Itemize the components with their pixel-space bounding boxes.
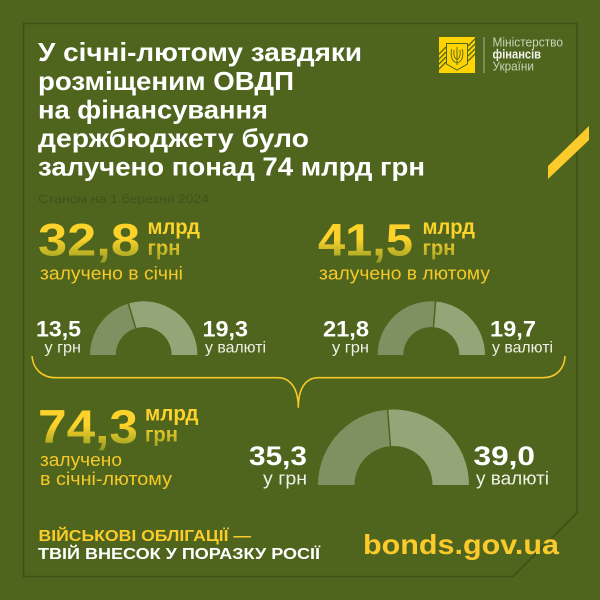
- February total: [318, 215, 475, 266]
- panel: February: [318, 215, 553, 356]
- February UAH value: у грн: [332, 340, 369, 356]
- slogan: ВІЙСЬКОВІ ОБЛІГАЦІЇ —: [38, 527, 252, 545]
- title: залучено понад 74 млрд грн: [38, 152, 425, 182]
- January UAH value: у грн: [44, 340, 81, 356]
- January caption: залучено в січні: [40, 263, 183, 283]
- February total: 41,5: [318, 215, 413, 266]
- January semicircle chart: [90, 301, 197, 355]
- combined total: [38, 400, 198, 453]
- combined semicircle chart: [318, 409, 469, 485]
- slogan: ТВІЙ ВНЕСОК У ПОРАЗКУ РОСІЇ: [38, 545, 321, 563]
- February FX value: 19,7: [490, 317, 536, 342]
- January UAH value: 13,5: [36, 317, 81, 342]
- January FX value: 19,3: [202, 317, 248, 342]
- combined caption: залучено: [40, 450, 122, 470]
- combined caption: в січні-лютому: [40, 469, 172, 489]
- date note: Станом на 1 березня 2024: [38, 192, 209, 206]
- logo text: [492, 36, 563, 74]
- logo text: фінансів: [492, 48, 541, 62]
- February FX value: у валюті: [492, 340, 553, 356]
- title: держбюджету було: [38, 123, 309, 153]
- title: [38, 37, 425, 182]
- title: розміщеним ОВДП: [38, 66, 294, 96]
- February caption: залучено в лютому: [319, 263, 490, 283]
- January UAH value: [36, 317, 81, 356]
- February UAH value: [323, 317, 369, 356]
- combined total: грн: [145, 424, 178, 447]
- yellow diagonal accent: [548, 126, 589, 179]
- combined total: 74,3: [38, 400, 138, 453]
- combined caption: [40, 450, 172, 489]
- logo: Ministry of Finance of Ukraine: [436, 36, 563, 74]
- logo text: Міністерство: [492, 36, 563, 50]
- combined total: млрд: [145, 403, 198, 426]
- bracket joining months to total: [32, 356, 565, 408]
- icon: yellow emblem with trident: [439, 37, 475, 73]
- February FX value: [490, 317, 553, 356]
- panel: January: [36, 215, 266, 356]
- January FX value: [202, 317, 266, 356]
- combined FX value: у валюті: [476, 468, 549, 488]
- combined UAH value: 35,3: [249, 441, 307, 471]
- logo text: України: [492, 60, 534, 74]
- January FX value: у валюті: [205, 340, 266, 356]
- combined UAH value: у грн: [263, 468, 307, 488]
- January total: 32,8: [38, 215, 140, 266]
- website link text: bonds.gov.ua: [363, 529, 559, 560]
- combined UAH value: [249, 441, 307, 488]
- January total: млрд: [148, 216, 200, 239]
- combined FX value: 39,0: [474, 441, 535, 471]
- January total: грн: [148, 237, 180, 260]
- February total: млрд: [422, 216, 475, 239]
- February semicircle chart: [378, 301, 485, 355]
- January total: [38, 215, 200, 266]
- slogan: [38, 527, 321, 563]
- title: на фінансування: [38, 94, 268, 124]
- February UAH value: 21,8: [323, 317, 369, 342]
- title: У січні-лютому завдяки: [38, 37, 362, 67]
- combined FX value: [474, 441, 549, 488]
- panel: January-February total: [38, 400, 549, 489]
- February total: грн: [422, 237, 456, 260]
